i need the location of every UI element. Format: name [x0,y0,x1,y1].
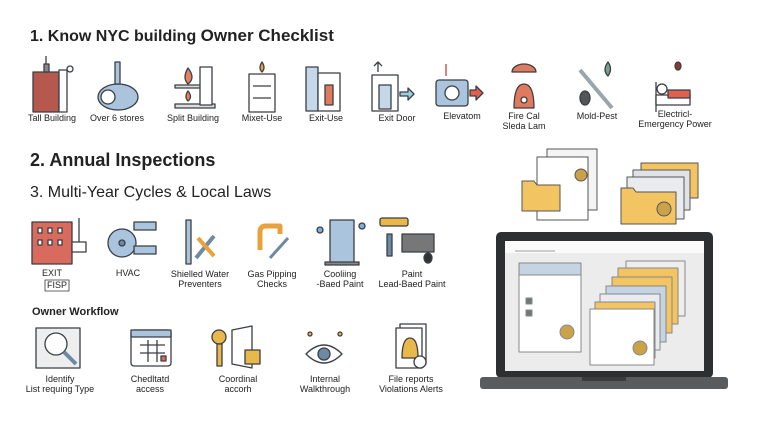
row 2 labels: HVAC [116,268,141,278]
icon: split building [175,67,215,108]
icon: file reports alert [396,324,426,368]
icon: tall building [33,56,73,112]
icon: mixed use [249,62,275,112]
row 2 labels: Gas Pipping [247,269,297,279]
illustration: document folders [522,149,698,224]
icon: key and door [212,326,260,368]
icon: emergency power [656,62,690,112]
icon: cooling tower [317,220,365,265]
row 3 labels: Internal [310,374,340,384]
icon: exit use [306,67,340,111]
row 2 labels: FISP [47,280,67,290]
illustration: laptop [480,232,728,389]
heading: owner workflow: Owner Workflow [32,306,119,318]
row 2 labels [42,268,446,291]
row 3 workflow icons [36,324,426,368]
icon: HVAC fan [108,222,156,257]
row 1 labels: Mixet-Use [242,113,282,123]
title: 1. Know NYC building Owner Checklist [30,26,334,45]
heading: annual inspections: 2. Annual Inspections [30,150,215,170]
row 1 labels: Sleda Lam [502,121,546,131]
row 3 labels: Coordinal [219,374,257,384]
icon: identify magnifier [36,328,80,368]
row 1 labels: Emergency Power [638,119,712,129]
icon: mold pest [580,62,612,108]
icon: water preventer [186,220,214,264]
row 3 labels: Walkthrough [300,384,350,394]
row 3 labels: accorh [224,384,252,394]
icon: boiler [98,62,138,110]
row 3 labels: Identify [45,374,75,384]
row 3 labels: Violations Alerts [379,384,443,394]
row 3 labels: List requing Type [26,384,94,394]
heading: multi-year cycles: 3. Multi-Year Cycles & Local Laws [30,184,271,201]
row 3 labels: access [136,384,165,394]
row 1 labels: Tall Building [28,113,76,123]
row 2 labels: EXIT [42,268,62,278]
row 2 icons [32,218,434,265]
row 2 labels: Paint [402,269,423,279]
row 1 labels: Exit-Use [309,113,343,123]
row 2 labels: Preventers [178,279,222,289]
screen: left document [519,263,581,352]
row 2 labels: Checks [257,279,288,289]
row 3 labels [26,374,443,394]
icon: gas piping [260,226,288,258]
row 1 labels: Split Building [167,113,219,123]
icon: fire alarm bell [512,64,536,108]
icon: FISP building [32,218,86,264]
row 2 labels: -Baed Paint [316,279,364,289]
row 2 labels: Lead-Baed Paint [378,279,446,289]
row 1 labels: Exit Door [378,113,416,123]
icon: elevator [436,64,483,106]
row 1 labels: Fire Cal [508,111,540,121]
row 3 labels: File reports [388,374,434,384]
row 1 labels [28,109,712,131]
icon: paint roller [380,218,434,263]
row 1: checklist icons [33,56,690,112]
screen: folder stack [590,261,685,365]
icon: exit door [372,62,414,111]
row 1 labels: Mold-Pest [577,111,618,121]
icon: calendar [131,330,171,366]
row 2 labels: Cooliing [324,269,356,279]
row 1 labels: Elevatom [443,111,481,121]
row 1 labels: Electricl- [658,109,692,119]
row 1 labels: Over 6 stores [90,113,145,123]
icon: eye [306,332,342,363]
row 3 labels: Chedltatd [131,374,169,384]
row 2 labels: Shielled Water [171,269,229,279]
